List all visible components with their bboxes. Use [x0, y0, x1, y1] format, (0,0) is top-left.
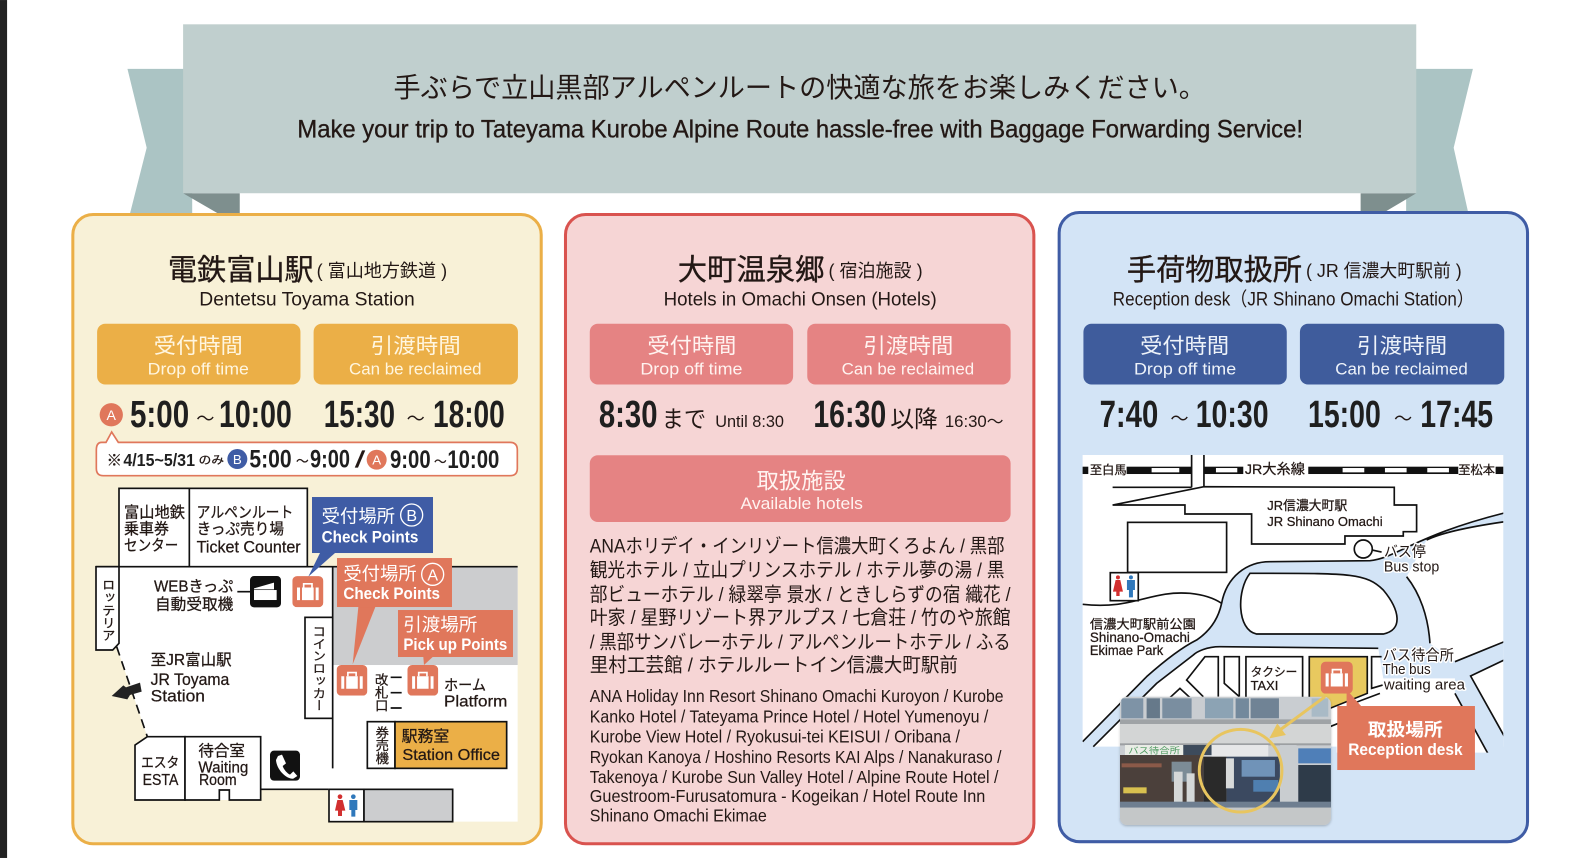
- hotel list english: Kurobe View Hotel / Ryokusui-tei KEISUI / Oribana /: [590, 727, 960, 747]
- callout: pick up points: [398, 610, 513, 665]
- icon: baggage pick up: [407, 665, 438, 696]
- panel: Hotels in Omachi Onsen: [565, 214, 1034, 844]
- station building: JR Shinano Omachi: [1267, 514, 1383, 529]
- hotel list japanese: 観光ホテル / 立山プリンスホテル / ホテル夢の湯 / 黒: [590, 560, 1005, 582]
- note callout: 9:00: [390, 447, 431, 474]
- note callout: /: [355, 446, 366, 472]
- times: 15:00: [1308, 393, 1381, 436]
- taxi: [1246, 657, 1303, 698]
- label: park: Ekimae Park: [1090, 642, 1164, 658]
- button: can be reclaimed: Can be reclaimed: [842, 359, 974, 378]
- box: station office: 駅務室: [402, 729, 449, 746]
- hotel list japanese: 里村工芸館 / ホテルルートイン信濃大町駅前: [590, 655, 958, 677]
- times: 8:30: [599, 393, 658, 436]
- callout: reception desk: Reception desk: [1348, 740, 1463, 759]
- button: drop off time: [97, 324, 300, 384]
- highlight circle: [1199, 729, 1282, 812]
- bus waiting area: The bus: [1383, 662, 1431, 678]
- label: park: 信濃大町駅前公園: [1090, 616, 1196, 631]
- box: waiting room: Waiting: [198, 760, 248, 777]
- label: ticket gate: [373, 673, 402, 712]
- times: ～: [196, 409, 214, 429]
- label: park: [1090, 616, 1196, 658]
- hotel list japanese: [590, 535, 1011, 677]
- area map: [1070, 455, 1517, 825]
- panel: Reception desk JR Shinano Omachi: [1059, 212, 1528, 842]
- heading: Dentetsu Toyama Station: [199, 290, 415, 311]
- box: station office: Station Office: [402, 747, 500, 764]
- callout: check points A: Check Points: [343, 584, 440, 603]
- box: ticket center and counter: Ticket Counter: [197, 538, 301, 557]
- times: 10:00: [219, 393, 292, 436]
- hotel list english: Takenoya / Kurobe Sun Valley Hotel / Alpine Route Hotel /: [590, 767, 999, 787]
- heading: Reception desk（JR Shinano Omachi Station）: [1113, 289, 1474, 311]
- note callout: ～: [434, 455, 447, 469]
- hotel list english: [590, 686, 1004, 825]
- callout: reception desk: [1337, 693, 1475, 770]
- button: available hotels: Available hotels: [740, 494, 863, 513]
- times: 10:30: [1196, 393, 1269, 436]
- box: Lotteria: [96, 567, 119, 650]
- photo of bus waiting area: [1120, 697, 1331, 825]
- button: can be reclaimed: 引渡時間: [371, 334, 461, 358]
- times: 16:30: [813, 393, 886, 436]
- times: ～: [1170, 409, 1189, 429]
- roads: [1082, 512, 1504, 753]
- note callout: 9:00: [310, 446, 350, 473]
- times: 15:30: [324, 393, 395, 436]
- bus stop: [1354, 540, 1439, 576]
- bus stop: バス停: [1384, 544, 1426, 561]
- callout: check points A: [337, 558, 452, 664]
- callout: check points B: Check Points: [322, 528, 418, 547]
- note callout: [96, 432, 517, 476]
- button: can be reclaimed: Can be reclaimed: [349, 359, 482, 378]
- railway line: [1083, 455, 1503, 487]
- times: Until 8:30: [715, 413, 784, 431]
- box: waiting room: Room: [199, 772, 237, 789]
- reception location: [1309, 657, 1383, 708]
- button: drop off time: Drop off time: [1134, 359, 1236, 378]
- map base: [96, 567, 518, 822]
- window edge: [0, 0, 7, 858]
- label: web ticket machine: WEBきっぷ: [154, 579, 233, 596]
- note callout: B: [233, 452, 242, 467]
- label: platform: Platform: [444, 694, 507, 711]
- button: drop off time: 受付時間: [154, 334, 243, 358]
- times: [100, 393, 505, 436]
- box: waiting room: [185, 737, 261, 800]
- box: ticket center and counter: 乗車券: [124, 521, 169, 538]
- note callout: 10:00: [447, 447, 499, 474]
- hotel list english: Kanko Hotel / Tateyama Prince Hotel / Hotel Yumenoyu /: [590, 706, 989, 726]
- times: A: [107, 408, 117, 424]
- box: coin locker: [305, 617, 333, 718]
- icon: baggage reception: [1321, 662, 1353, 694]
- button: available hotels: 取扱施設: [757, 469, 846, 494]
- button: drop off time: 受付時間: [647, 334, 736, 358]
- title english: Make your trip to Tateyama Kurobe Alpine Route hassle-free with Baggage Forwarding Service!: [297, 116, 1303, 144]
- label: to JR Toyama Station: [151, 652, 232, 706]
- map base: [1083, 455, 1503, 753]
- button: can be reclaimed: [807, 324, 1011, 384]
- times: 以降: [890, 406, 938, 432]
- heading: 手荷物取扱所: [1127, 254, 1302, 287]
- button: drop off time: 受付時間: [1140, 334, 1229, 358]
- box: station office: 券売機: [374, 726, 389, 765]
- callout: check points A: 受付場所: [343, 564, 417, 584]
- heading: ( 宿泊施設 ): [829, 261, 923, 281]
- button: can be reclaimed: [1300, 324, 1504, 384]
- label: park: Shinano-Omachi: [1090, 629, 1190, 645]
- callout: check points B: [308, 497, 433, 577]
- bus waiting area: waiting area: [1383, 677, 1466, 693]
- note callout: のみ: [199, 454, 224, 466]
- hotel list japanese: ANAホリデイ・インリゾート信濃大町くろよん / 黒部: [590, 535, 1005, 557]
- floor map: [96, 432, 518, 822]
- button: can be reclaimed: 引渡時間: [1357, 334, 1447, 358]
- label: to JR Toyama Station: JR Toyama: [151, 670, 230, 689]
- times: 17:45: [1420, 393, 1493, 436]
- bus waiting area: [1383, 647, 1466, 693]
- restrooms: [329, 789, 453, 822]
- times: まで: [662, 406, 706, 432]
- note callout: A: [372, 453, 381, 468]
- label: platform: [444, 678, 507, 711]
- station building: [1113, 487, 1417, 544]
- box: Lotteria: ロッテリア: [100, 578, 115, 642]
- label: ticket gate: 改札口: [373, 673, 388, 712]
- icon: telephone: [270, 751, 300, 781]
- callout: pick up points: 引渡場所: [403, 615, 477, 635]
- box: ticket center and counter: アルペンルート: [197, 504, 293, 521]
- times: ～: [407, 409, 425, 429]
- hotel list japanese: / 黒部サンバレーホテル / アルペンルートホテル / ふる: [590, 631, 1011, 653]
- box: ticket center and counter: 富山地鉄: [124, 504, 185, 521]
- railway line: JR大糸線: [1245, 461, 1305, 477]
- box: station office: [367, 722, 507, 768]
- note callout: 4/15~5/31: [123, 450, 195, 470]
- times: [599, 393, 1004, 436]
- times: 7:40: [1100, 393, 1158, 436]
- button: can be reclaimed: Can be reclaimed: [1335, 359, 1468, 378]
- note callout: ～: [296, 454, 309, 468]
- heading: [168, 254, 447, 311]
- note callout: ※: [107, 452, 122, 469]
- hotel list english: ANA Holiday Inn Resort Shinano Omachi Kuroyon / Kurobe: [590, 686, 1004, 706]
- icon: baggage A: [337, 665, 367, 696]
- hotel list english: Guestroom-Furusatomura - Kogeikan / Hotel Route Inn: [590, 786, 985, 806]
- button: can be reclaimed: [314, 324, 518, 384]
- box: ESTA: エスタ: [141, 754, 179, 770]
- button: available hotels: [590, 455, 1011, 522]
- arrow to reception: [1269, 697, 1325, 738]
- heading: ( 富山地方鉄道 ): [317, 261, 447, 281]
- box: coin locker: コインロッカー: [311, 625, 326, 712]
- times: 5:00: [130, 393, 189, 436]
- callout: check points B: 受付場所: [322, 507, 395, 527]
- times: 16:30～: [945, 413, 1004, 431]
- box: ESTA: [135, 737, 185, 800]
- title japanese: 手ぶらで立山黒部アルペンルートの快適な旅をお楽しみください。: [394, 72, 1206, 103]
- dashed walkway: [117, 647, 147, 737]
- small building shapes: [1167, 657, 1380, 727]
- bus waiting area: バス待合所: [1383, 647, 1454, 664]
- button: drop off time: Drop off time: [148, 359, 249, 378]
- hotel list japanese: 叶家 / 星野リゾート界アルプス / 七倉荘 / 竹のや旅館: [590, 607, 1011, 629]
- station building: JR信濃大町駅: [1267, 498, 1347, 513]
- building block: [1128, 522, 1227, 572]
- callout: pick up points: Pick up Points: [403, 635, 507, 654]
- box: ESTA: ESTA: [143, 772, 179, 789]
- hotel list english: Shinano Omachi Ekimae: [590, 805, 767, 825]
- heading: [664, 254, 937, 311]
- railway line: 至松本: [1458, 463, 1495, 477]
- callout: reception desk: 取扱場所: [1368, 720, 1443, 740]
- arrow: [112, 683, 142, 699]
- times: [1100, 393, 1493, 436]
- callout: check points A: A: [427, 567, 438, 584]
- box: ticket center and counter: きっぷ売り場: [197, 521, 284, 538]
- taxi: TAXI: [1251, 678, 1278, 693]
- heading: [1113, 254, 1474, 311]
- ribbon: right tail: [1361, 69, 1473, 216]
- button: drop off time: Drop off time: [640, 359, 743, 378]
- bus stop: Bus stop: [1384, 560, 1439, 576]
- ribbon: left tail: [127, 69, 240, 216]
- photo of bus waiting area: バス待合所: [1128, 744, 1180, 755]
- restrooms: [1110, 573, 1138, 601]
- label: platform: ホーム: [444, 678, 486, 694]
- icon: baggage B: [292, 576, 323, 607]
- taxi: タクシー: [1251, 665, 1297, 679]
- icon: web ticket machine: [250, 576, 281, 607]
- button: can be reclaimed: 引渡時間: [863, 334, 953, 358]
- heading: ( JR 信濃大町駅前 ): [1306, 261, 1462, 281]
- hotel list english: Ryokan Kanoya / Hoshino Resorts KAI Alps / Nanakuraso /: [590, 747, 1002, 767]
- box: waiting room: 待合室: [198, 743, 245, 760]
- panel: Dentetsu Toyama Station: [73, 214, 541, 844]
- label: to JR Toyama Station: Station: [151, 687, 205, 706]
- button: drop off time: [590, 324, 793, 384]
- box: ticket center and counter: [119, 488, 307, 567]
- header banner: [183, 24, 1416, 193]
- heading: Hotels in Omachi Onsen (Hotels): [664, 290, 937, 311]
- times: 18:00: [433, 393, 505, 436]
- railway line: 至白馬: [1090, 463, 1127, 477]
- label: web ticket machine: 自動受取機: [155, 596, 233, 613]
- button: drop off time: [1083, 324, 1287, 384]
- hotel list japanese: 部ビューホテル / 緑翠亭 景水 / ときしらずの宿 織花 /: [590, 584, 1011, 606]
- callout: check points B: B: [406, 508, 417, 525]
- times: ～: [1394, 409, 1412, 429]
- heading: 大町温泉郷: [678, 254, 824, 287]
- note callout: 5:00: [249, 446, 292, 473]
- heading: 電鉄富山駅: [168, 254, 314, 287]
- label: to JR Toyama Station: 至JR富山駅: [151, 652, 232, 669]
- label: web ticket machine: [154, 579, 250, 613]
- box: ticket center and counter: センター: [124, 538, 178, 555]
